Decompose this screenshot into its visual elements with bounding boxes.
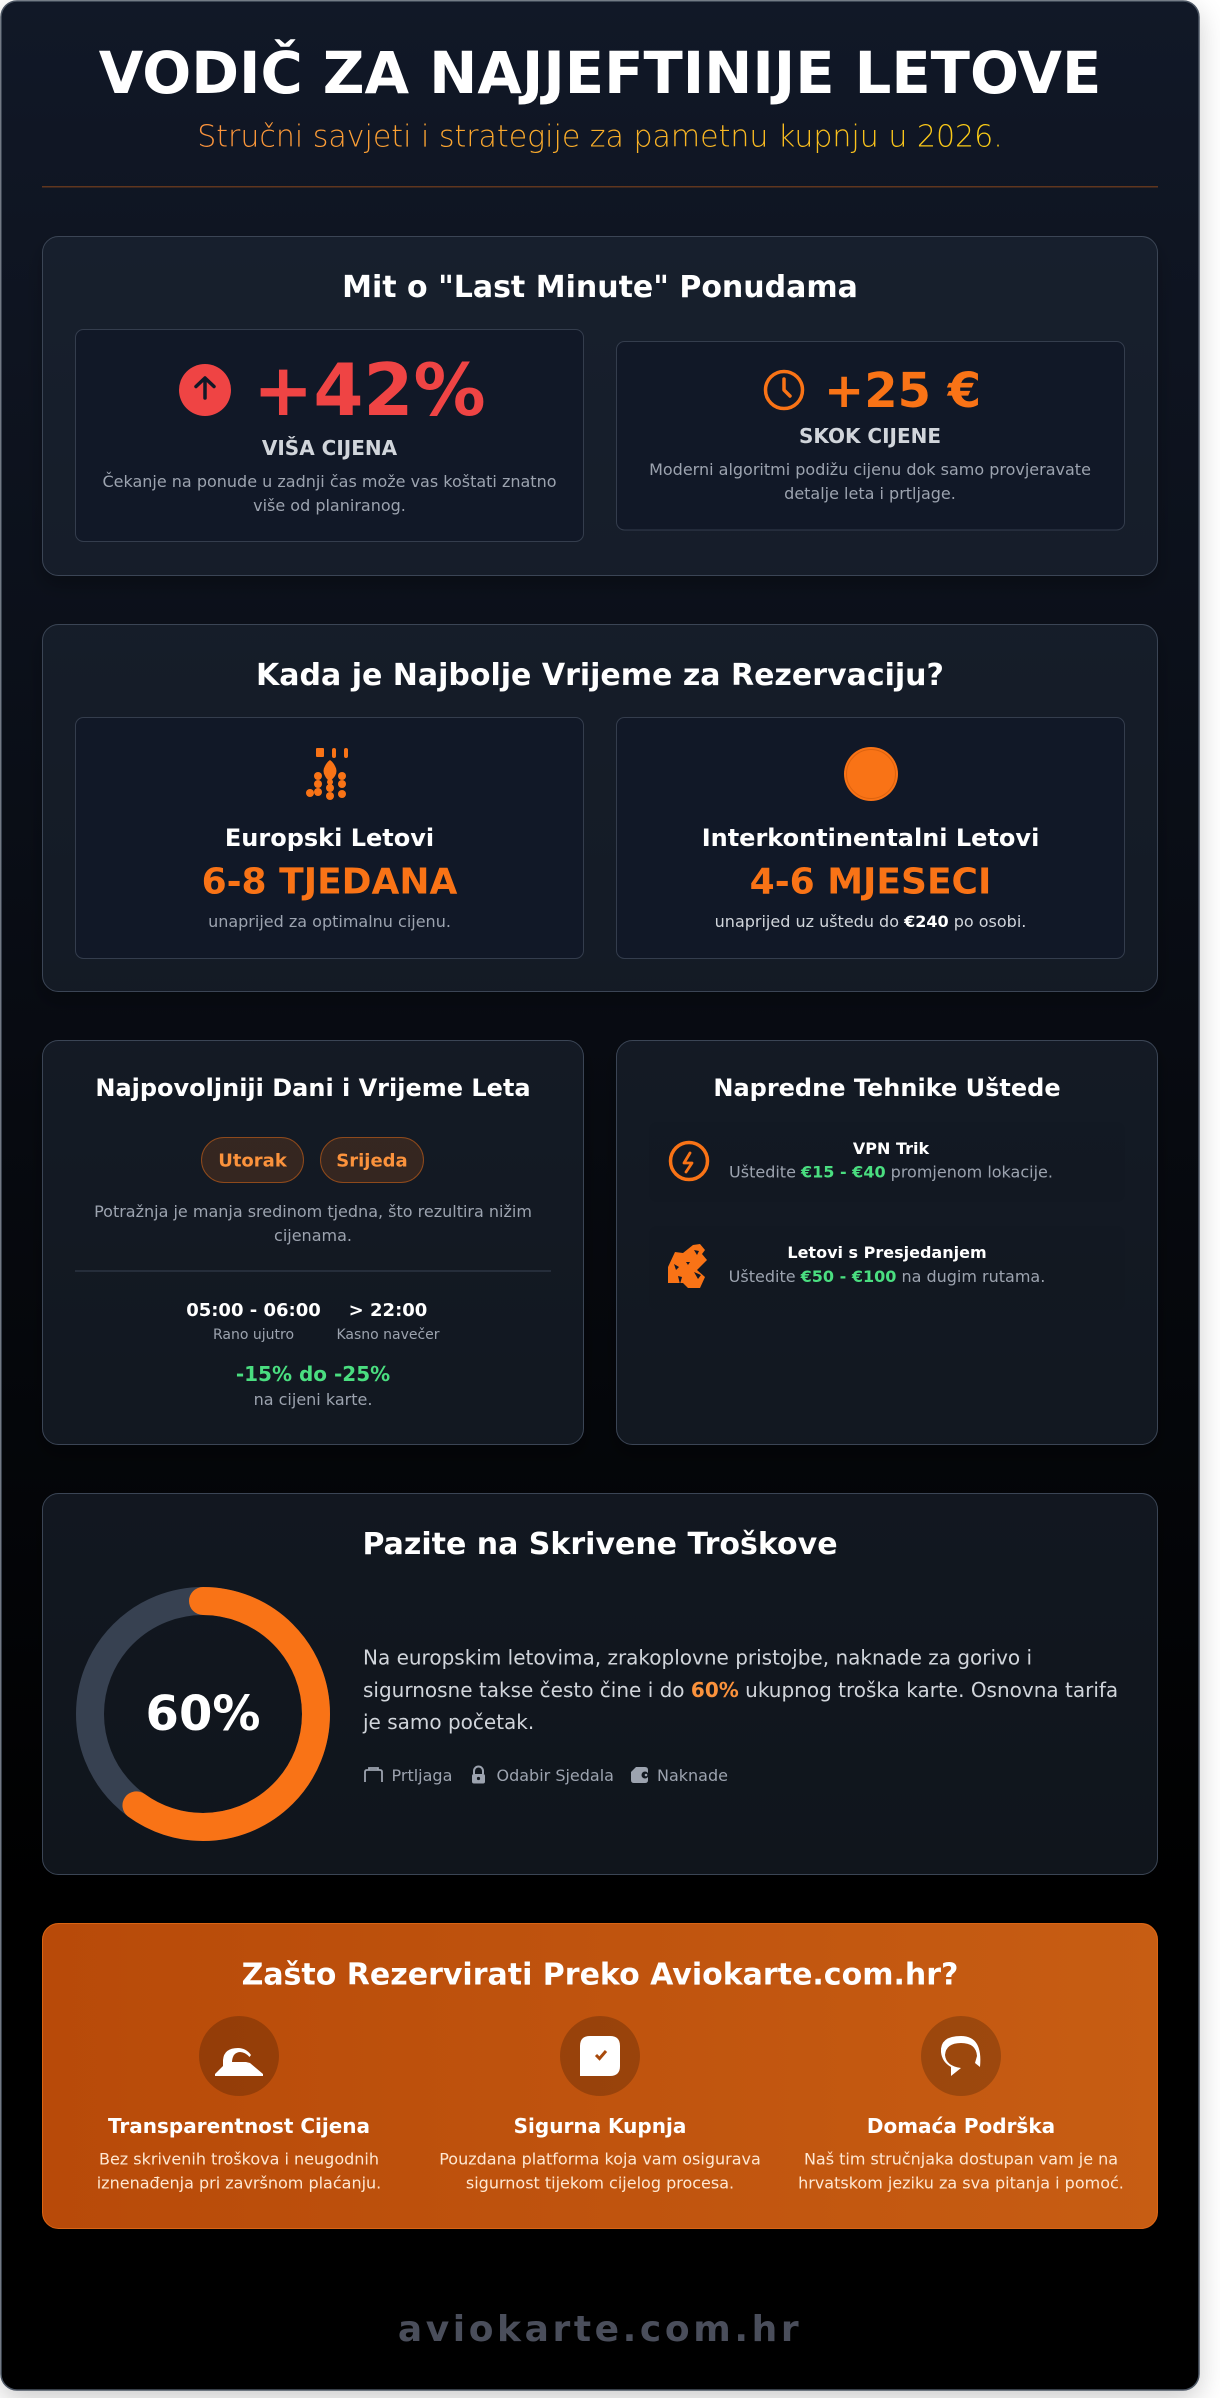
benefit: local support: Domaća Podrška	[867, 2114, 1055, 2138]
legend: fees: Naknade	[657, 1766, 728, 1785]
technique: layovers: Letovi s Presjedanjem	[787, 1243, 987, 1262]
technique: vpn	[649, 1122, 1125, 1202]
technique: layovers	[649, 1226, 1125, 1310]
benefit: transparent price: Transparentnost Cijena	[108, 2114, 370, 2138]
technique: layovers: Uštedite €50 - €100 na dugim rutama.	[729, 1267, 1045, 1286]
benefit: transparent price: iznenađenja pri završnom plaćanju.	[97, 2174, 381, 2192]
legend: seat selection: Odabir Sjedala	[496, 1766, 614, 1785]
stat label: SKOK CIJENE	[799, 424, 941, 448]
value: 6-8 TJEDANA	[202, 862, 458, 902]
panel: cheapest days and times	[42, 1040, 584, 1445]
description: detalje leta i prtljage.	[784, 484, 956, 503]
heading: Pazite na Skrivene Troškove	[362, 1527, 838, 1562]
icon: arrow up circle	[179, 364, 231, 416]
pill: tuesday: Utorak	[218, 1150, 288, 1172]
benefit: local support: hrvatskom jeziku za sva pitanja i pomoć.	[798, 2174, 1124, 2192]
pill: wednesday: Srijeda	[336, 1150, 408, 1172]
heading: Mit o "Last Minute" Ponudama	[342, 270, 858, 305]
note: unaprijed uz uštedu do €240 po osobi.	[715, 912, 1026, 931]
benefit: secure purchase: Sigurna Kupnja	[514, 2114, 686, 2138]
savings	[236, 1362, 390, 1409]
icon: route	[668, 1244, 707, 1288]
heading: Kada je Najbolje Vrijeme za Rezervaciju?	[256, 658, 944, 693]
description: Potražnja je manja sredinom tjedna, što rezultira nižim	[94, 1202, 532, 1221]
donut chart: 60%	[146, 1686, 260, 1742]
card: price jump	[616, 342, 1124, 530]
benefit: local support	[798, 2016, 1124, 2192]
description: više od planiranog.	[253, 496, 406, 515]
legend: baggage	[365, 1766, 452, 1785]
paragraph: sigurnosne takse često čine i do 60% ukupnog troška karte. Osnovna tarifa	[363, 1678, 1118, 1702]
time: late evening: > 22:00	[349, 1300, 427, 1321]
time: late evening	[336, 1300, 440, 1343]
legend: baggage: Prtljaga	[392, 1766, 452, 1785]
paragraph: Na europskim letovima, zrakoplovne pristojbe, naknade za gorivo i	[363, 1646, 1032, 1670]
benefit: local support: Naš tim stručnjaka dostupan vam je na	[804, 2150, 1118, 2168]
card: european flights	[76, 718, 584, 958]
time: early morning: 05:00 - 06:00	[186, 1300, 321, 1321]
panel: hidden costs	[42, 1493, 1158, 1875]
panel: why book with aviokarte	[42, 1924, 1158, 2228]
footer brand: aviokarte.com.hr	[398, 2309, 802, 2350]
benefit: secure purchase	[439, 2016, 761, 2192]
heading: Najpovoljniji Dani i Vrijeme Leta	[95, 1074, 531, 1102]
card: higher price	[76, 330, 584, 542]
panel: last minute myth	[42, 236, 1158, 576]
benefit: transparent price: Bez skrivenih troškova i neugodnih	[99, 2150, 379, 2168]
technique: vpn: VPN Trik	[853, 1139, 929, 1158]
value: 4-6 MJESECI	[750, 862, 991, 902]
note: unaprijed za optimalnu cijenu.	[208, 912, 451, 931]
icon: clock	[766, 372, 802, 408]
stat: +42%	[253, 348, 486, 432]
icon: europe dots	[306, 748, 348, 800]
stat: +25 €	[824, 363, 981, 419]
title: Europski Letovi	[225, 824, 434, 852]
panel: best booking time	[42, 624, 1158, 992]
stat label: VIŠA CIJENA	[262, 436, 398, 460]
description: cijenama.	[274, 1226, 352, 1245]
time: early morning: Rano ujutro	[213, 1327, 294, 1343]
benefit: transparent price	[97, 2016, 381, 2192]
technique: vpn: Uštedite €15 - €40 promjenom lokacije.	[729, 1162, 1053, 1182]
icon: bolt	[670, 1142, 708, 1180]
icon: shield check	[560, 2016, 640, 2096]
icon: globe	[844, 747, 898, 801]
pill: wednesday	[320, 1138, 424, 1182]
benefit: secure purchase: Pouzdana platforma koja vam osigurava	[439, 2150, 761, 2168]
savings: -15% do -25%	[236, 1362, 390, 1386]
panel: advanced saving techniques	[616, 1040, 1158, 1445]
card: intercontinental flights	[616, 718, 1124, 958]
savings: na cijeni karte.	[254, 1390, 372, 1409]
heading: Napredne Tehnike Uštede	[713, 1074, 1061, 1102]
subtitle: Stručni savjeti i strategije za pametnu kupnju u 2026.	[197, 120, 1003, 154]
time: early morning	[186, 1300, 321, 1343]
title: VODIČ ZA NAJJEFTINIJE LETOVE	[99, 39, 1101, 107]
header	[99, 39, 1101, 154]
description: Moderni algoritmi podižu cijenu dok samo provjeravate	[649, 460, 1091, 479]
heading: Zašto Rezervirati Preko Aviokarte.com.hr?	[242, 1958, 958, 1992]
paragraph: je samo početak.	[362, 1710, 534, 1734]
pill: tuesday	[202, 1138, 304, 1182]
time: late evening: Kasno navečer	[336, 1327, 440, 1343]
donut chart	[90, 1601, 316, 1827]
description: Čekanje na ponude u zadnji čas može vas koštati znatno	[102, 472, 557, 491]
title: Interkontinentalni Letovi	[702, 824, 1039, 852]
icon: price tag dome	[199, 2016, 279, 2096]
benefit: secure purchase: sigurnost tijekom cijelog procesa.	[466, 2174, 734, 2192]
icon: chat loop	[921, 2016, 1001, 2096]
